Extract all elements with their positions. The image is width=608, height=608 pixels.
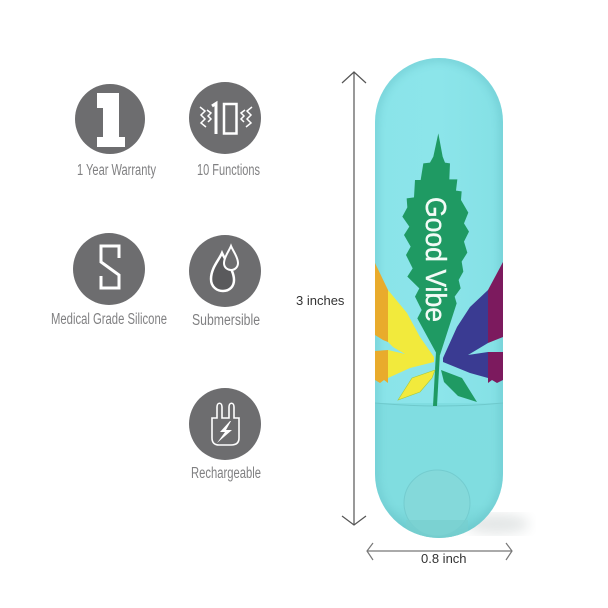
button [404,470,470,540]
badge: medical grade silicone: Medical Grade Silicone [51,311,167,328]
badge: 1 year warranty: 1 Year Warranty [77,162,156,179]
badge: medical grade silicone [51,233,167,328]
badge: submersible [189,235,261,329]
width label: 0.8 inch [421,551,467,566]
width arrow [367,543,512,560]
brand text: Good Vibe [419,197,451,322]
height arrow [342,72,366,525]
product shadow [465,514,529,534]
badge: 1 year warranty [75,84,156,179]
infographic [52,58,528,563]
badge: rechargeable [189,388,261,482]
rainbow leaf: right [443,262,503,383]
small leaves and stem [398,352,477,406]
badge: submersible: Submersible [192,312,260,329]
green leaf [402,133,469,355]
product body [375,58,503,540]
badge: 10 functions [189,82,261,179]
height label: 3 inches [296,293,345,308]
badge: 10 functions: 10 Functions [197,162,260,179]
badge: rechargeable: Rechargeable [191,465,261,482]
rainbow leaf: left [375,263,434,383]
